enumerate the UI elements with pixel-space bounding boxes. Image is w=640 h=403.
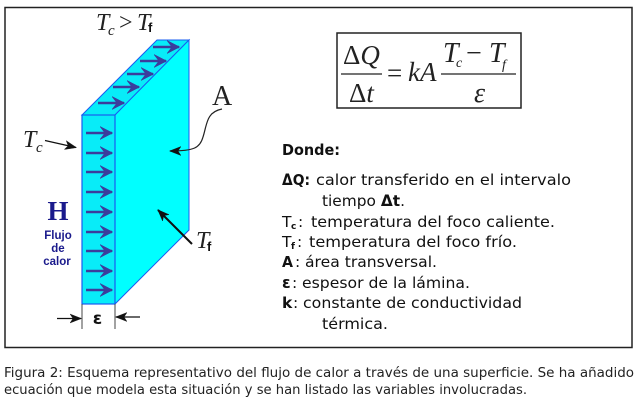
text block: variable definitions: k [282,294,293,312]
text block: variable definitions: temperatura del foco frío. [309,233,517,251]
label: A with curved arrow [170,81,233,151]
text block: variable definitions: c [291,222,296,232]
label: Tc with arrow: T [23,127,38,153]
label: Tc > Tf: T [96,10,111,36]
equation box: f [502,58,508,73]
dimension: thickness epsilon: ε [93,309,102,329]
arrows: heat flow on front face [86,133,112,290]
label: H heat flow: de [51,243,65,255]
label: Tc > Tf: T [137,10,152,36]
text block: variable definitions: : [292,274,297,292]
text block: variable definitions: T [281,213,292,231]
dimension: thickness epsilon [57,304,140,329]
text block: variable definitions: : [298,213,303,231]
text block: variable definitions: : [297,233,302,251]
text block: variable definitions: : [293,294,298,312]
text block: variable definitions: térmica. [322,315,388,333]
text block: variable definitions: f [291,242,295,252]
text block: variable definitions: A [282,253,293,271]
label: Tf with arrow: f [207,239,212,254]
label: Tc > Tf: c [108,23,115,39]
text block: variable definitions: área transversal. [305,253,437,271]
label: Tc > Tf: > [119,10,133,36]
label: H heat flow: H [47,196,69,226]
text block: variable definitions: ΔQ: [282,171,310,189]
caption: Figura 2: Esquema representativo del flujo de calor a través de una superficie. Se ha añadido [4,366,634,381]
caption [4,366,634,398]
slab top face [82,40,189,115]
label: Tf with arrow [158,210,212,254]
text block: variable definitions: : [295,253,300,271]
text block: variable definitions: calor transferido en el intervalo [316,171,571,189]
text block: variable definitions: tiempo Δt. [322,192,405,210]
diagram: conducting slab [82,40,189,304]
label: Tc > Tf [96,10,153,39]
label: H heat flow: calor [43,256,71,268]
label: A with curved arrow: A [212,81,233,112]
equation box: ΔQ [343,40,380,70]
label: Tf with arrow: T [196,228,211,254]
slab front face [82,115,115,304]
heading: Donde: Donde: [282,141,340,159]
label: Tc with arrow [23,127,76,156]
equation box: T [443,38,461,69]
text block: variable definitions [281,141,571,333]
caption: ecuación que modela esta situación y se han listado las variables involucradas. [4,383,527,398]
label: Tc > Tf: f [148,20,153,35]
slab side face [115,40,189,304]
arrows: heat flow on top face [98,47,179,103]
equation box [337,33,521,109]
equation box: − [466,38,482,69]
label: H heat flow [43,196,72,268]
label: H heat flow: Flujo [44,230,72,242]
text block: variable definitions: ε [282,274,291,292]
text block: variable definitions: espesor de la lámina. [302,274,470,292]
label: Tc with arrow: c [36,140,43,156]
equation box: = [387,58,402,88]
equation box: c [456,56,463,71]
equation box: Δt [349,78,375,108]
text block: variable definitions: temperatura del foco caliente. [311,213,555,231]
equation box: ε [474,78,485,109]
text block: variable definitions: T [281,233,292,251]
text block: variable definitions: constante de conductividad [303,294,522,312]
equation box: T [489,38,507,69]
equation box: kA [408,57,437,87]
